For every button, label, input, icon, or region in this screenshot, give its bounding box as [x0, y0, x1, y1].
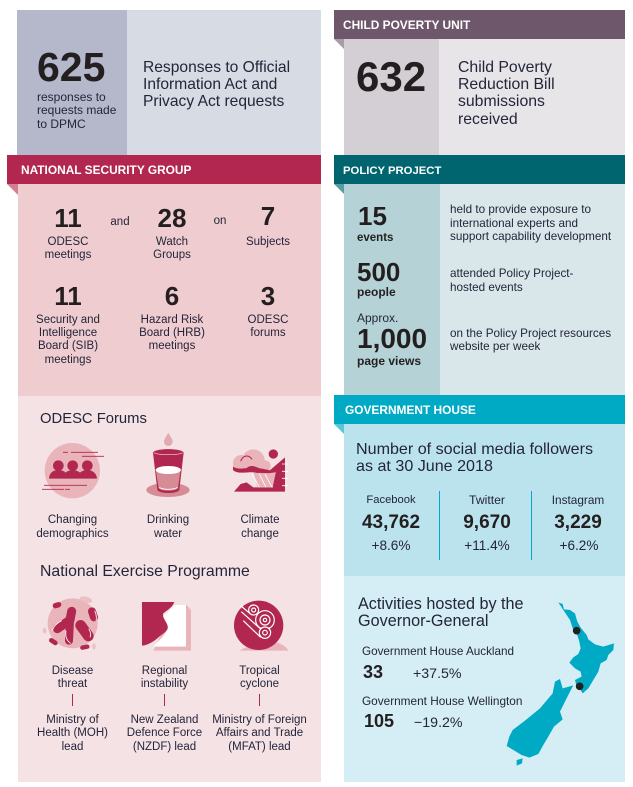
text: page views description: website per week	[449, 340, 540, 353]
map: New Zealand	[507, 602, 614, 766]
label: NZDF lead: Defence Force	[127, 727, 202, 739]
stat: 6 HRB meetings: Board (HRB)	[139, 327, 205, 339]
stat: 6 HRB meetings: Hazard Risk	[141, 314, 204, 326]
stat: 11 SIB meetings: Security and	[36, 314, 100, 326]
icon: regional instability	[142, 602, 191, 651]
heading: child poverty unit: CHILD POVERTY UNIT	[343, 18, 471, 32]
text: official information description: Privacy Act requests	[143, 93, 284, 110]
stat: 11 SIB meetings: 11	[54, 281, 82, 311]
stat: instagram	[552, 493, 604, 553]
label: drinking water	[147, 514, 189, 540]
label: MFAT lead: Affairs and Trade	[216, 727, 303, 739]
stat: 3 ODESC forums: 3	[261, 281, 275, 311]
connector line: cyclone	[259, 694, 260, 706]
text: child poverty description: Child Poverty	[458, 59, 552, 76]
stat: instagram: 3,229	[554, 512, 602, 533]
stat: 3 ODESC forums: ODESC	[248, 314, 288, 326]
panel: policy project	[334, 155, 625, 395]
stat: government house wellington	[362, 694, 522, 731]
stat: government house wellington: 105	[364, 711, 394, 731]
stat: 625 responses: requests made	[37, 103, 117, 117]
heading: policy project: POLICY PROJECT	[343, 165, 441, 177]
stat: approx 1,000 page views: 1,000	[357, 323, 427, 354]
heading: national security group: NATIONAL SECURITY GROUP	[21, 163, 192, 177]
stat: 7 subjects: Subjects	[246, 236, 290, 248]
stat: government house auckland: 33	[363, 662, 383, 682]
icon: climate change	[233, 449, 288, 492]
stat: facebook: +8.6%	[372, 538, 410, 553]
text: events description: held to provide exposure to	[450, 203, 591, 216]
stat: 11 SIB meetings: meetings	[45, 354, 92, 366]
label: changing demographics	[36, 514, 109, 540]
heading: policy project	[334, 155, 625, 194]
label: MOH lead: Health (MOH)	[37, 727, 108, 739]
text: people description: attended Policy Project-	[450, 267, 574, 280]
text: official information description: Responses to Official	[143, 59, 290, 76]
stat: 11 ODESC meetings	[45, 203, 92, 261]
text: events description: international experts and	[450, 217, 578, 230]
stat: 7 subjects	[246, 201, 290, 248]
stat: 6 HRB meetings: meetings	[149, 340, 196, 352]
stat: twitter: Twitter	[469, 493, 505, 507]
panel: forums and exercises	[18, 396, 321, 782]
stat: government house auckland	[362, 645, 514, 682]
label: MOH lead: lead	[62, 741, 83, 753]
stat: 625 responses: 625	[37, 44, 105, 90]
stat: 3 ODESC forums: forums	[250, 327, 286, 339]
stat: 15 events	[357, 201, 393, 244]
stat: facebook: 43,762	[362, 512, 420, 533]
label: drinking water: water	[153, 528, 182, 540]
stat: 632: 632	[356, 53, 426, 100]
label: MFAT lead: (MFAT) lead	[228, 741, 291, 753]
stat: 28 watch groups: Watch	[156, 236, 188, 248]
stat: 500 people: people	[357, 285, 396, 299]
stat: government house auckland: Government House Auckland	[362, 645, 514, 658]
text: page views description	[449, 327, 611, 353]
stat: 11 SIB meetings	[36, 281, 100, 366]
stat: 500 people: 500	[357, 257, 400, 287]
label: changing demographics: demographics	[36, 528, 109, 540]
stat: 11 SIB meetings: Board (SIB)	[38, 340, 98, 352]
heading: national security group	[7, 155, 321, 195]
text: child poverty description: Reduction Bill	[458, 76, 555, 93]
text: followers heading: Number of social media followers	[356, 440, 593, 458]
stat: 625 responses: responses to	[37, 90, 106, 104]
label: regional instability: instability	[141, 678, 188, 690]
stat: 11 ODESC meetings: 11	[54, 203, 82, 233]
label: NZDF lead	[127, 714, 202, 753]
label: climate change: change	[241, 528, 279, 540]
stat: government house wellington: −19.2%	[414, 715, 463, 731]
stat: approx 1,000 page views	[357, 311, 427, 368]
label: NZDF lead: New Zealand	[131, 714, 198, 726]
label: disease threat: threat	[58, 678, 88, 690]
panel: official information requests	[17, 10, 321, 155]
connector: and: and	[110, 216, 130, 228]
icon: tropical cyclone	[234, 601, 289, 651]
stat: government house auckland: +37.5%	[413, 666, 462, 682]
stat: approx 1,000 page views: Approx.	[357, 311, 398, 325]
stat: instagram: Instagram	[552, 493, 604, 507]
text: followers heading: as at 30 June 2018	[356, 457, 493, 475]
text: people description	[450, 267, 574, 294]
label: climate change: Climate	[241, 514, 279, 526]
label: tropical cyclone: Tropical	[239, 665, 280, 677]
stat: government house wellington: Government House Wellington	[362, 694, 522, 708]
stat: 3 ODESC forums	[248, 281, 288, 339]
stat: 7 subjects: 7	[261, 201, 275, 231]
stat: facebook	[362, 494, 420, 553]
text: activities heading	[358, 595, 524, 630]
stat: 15 events: 15	[358, 201, 387, 231]
stat: approx 1,000 page views: page views	[357, 354, 421, 368]
connector line: disease	[72, 694, 73, 706]
label: changing demographics: Changing	[48, 514, 97, 526]
label: MFAT lead	[212, 714, 307, 753]
label: regional instability: Regional	[142, 665, 187, 677]
stat: 6 HRB meetings: 6	[165, 281, 179, 311]
stat: twitter: 9,670	[463, 512, 511, 533]
label: tropical cyclone: cyclone	[240, 678, 279, 690]
panel: child poverty unit	[334, 10, 625, 155]
label: regional instability	[141, 665, 188, 690]
stat: 625 responses: to DPMC	[37, 117, 86, 131]
label: drinking water: Drinking	[147, 514, 189, 526]
stat: 11 SIB meetings: Intelligence	[39, 327, 97, 339]
panel: government house social media	[334, 395, 625, 576]
stat: 28 watch groups: Groups	[153, 249, 191, 261]
panel: activities hosted by the governor-general	[344, 576, 625, 782]
label: NZDF lead: (NZDF) lead	[133, 741, 196, 753]
icon: drinking water	[146, 433, 190, 497]
text: child poverty description: submissions	[458, 93, 545, 110]
stat: 15 events: events	[357, 232, 393, 244]
label: tropical cyclone	[239, 665, 280, 690]
text: followers heading	[356, 440, 593, 475]
icon: disease threat	[43, 595, 98, 650]
text: official information description	[143, 59, 290, 110]
stat: twitter: +11.4%	[464, 538, 510, 553]
text: people description: hosted events	[450, 281, 523, 294]
text: events description	[450, 203, 612, 243]
connector line: regional	[164, 694, 165, 706]
label: disease threat	[52, 665, 93, 690]
heading: child poverty unit	[334, 10, 625, 49]
stat: 28 watch groups	[153, 203, 191, 261]
label: climate change	[241, 514, 279, 540]
stat: facebook: Facebook	[366, 494, 416, 506]
text: activities heading: Governor-General	[358, 612, 488, 630]
text: activities heading: Activities hosted by the	[358, 595, 524, 613]
heading: government house: GOVERNMENT HOUSE	[345, 403, 476, 417]
panel: national security group	[7, 155, 321, 396]
stat: 11 ODESC meetings: ODESC	[48, 236, 88, 248]
stat: instagram: +6.2%	[560, 538, 598, 553]
label: MOH lead	[37, 714, 108, 753]
stat: 6 HRB meetings	[139, 281, 205, 352]
text: official information description: Information Act and	[143, 76, 277, 93]
icon: changing demographics	[42, 443, 104, 498]
stat: 11 ODESC meetings: meetings	[45, 249, 92, 261]
stat: 625 responses	[37, 44, 117, 131]
text: child poverty description	[458, 59, 555, 128]
heading: government house	[334, 395, 625, 434]
text: events description: support capability development	[450, 230, 612, 243]
label: disease threat: Disease	[52, 665, 93, 677]
connector: on: on	[214, 215, 226, 227]
label: MOH lead: Ministry of	[46, 714, 99, 726]
heading: national exercise programme: National Exercise Programme	[40, 563, 250, 580]
text: page views description: on the Policy Project resources	[450, 327, 611, 340]
stat: 28 watch groups: 28	[158, 203, 186, 233]
heading: ODESC forums: ODESC Forums	[40, 411, 147, 427]
stat: twitter	[463, 493, 511, 553]
label: MFAT lead: Ministry of Foreign	[212, 714, 307, 726]
text: child poverty description: received	[458, 111, 518, 128]
